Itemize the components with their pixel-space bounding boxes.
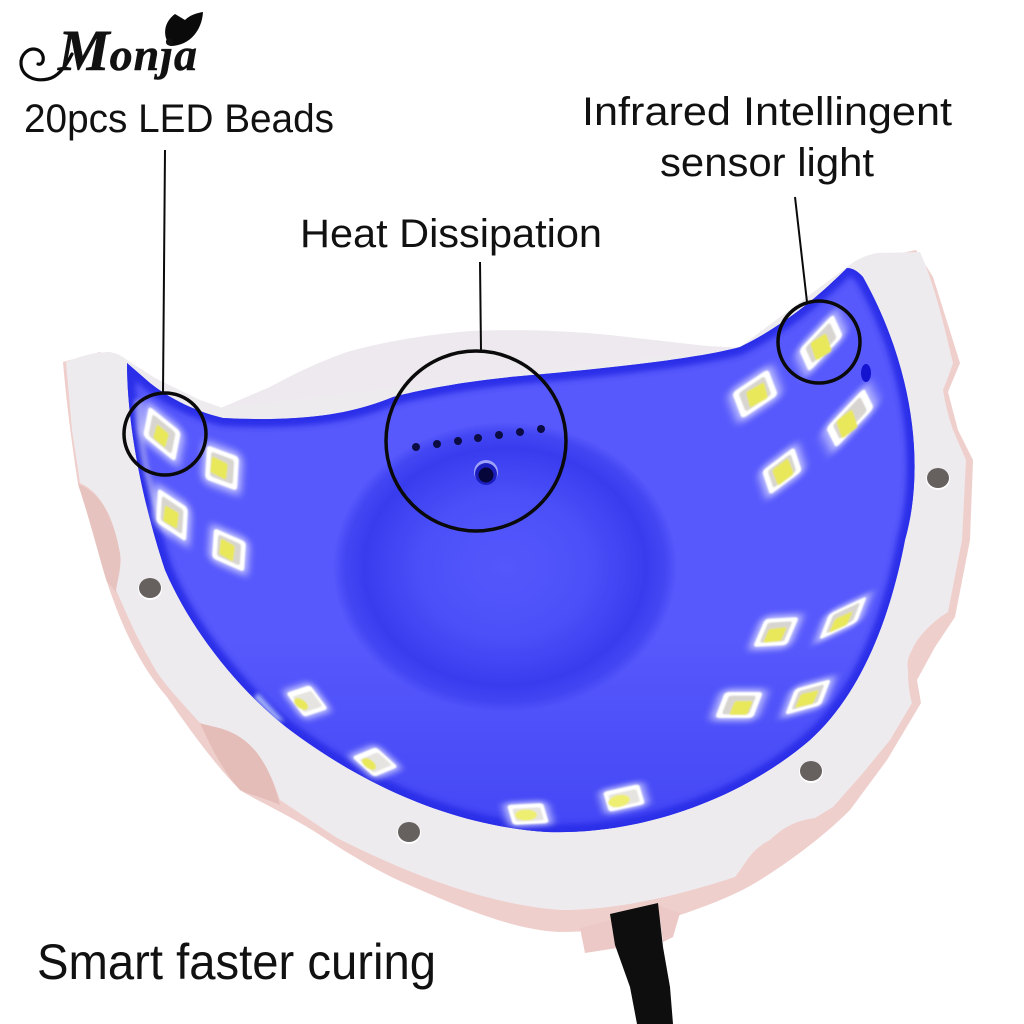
LED bead 10 (780, 675, 836, 719)
label: Infrared Intellingent sensor light (582, 90, 952, 185)
LED bead 3 (153, 483, 191, 547)
LED bead 6 (347, 744, 403, 780)
label: 20pcs LED Beads: 20pcs LED Beads (24, 97, 334, 141)
LED bead 2 (202, 440, 242, 496)
blue illuminated interior (127, 268, 915, 832)
inner dome shadow (333, 422, 677, 712)
LED bead 4 (209, 524, 249, 576)
lower-left reflection (254, 693, 285, 722)
label: Infrared Intellingent sensor light: Infrared Intellingent (582, 90, 952, 134)
LED bead 7 (503, 801, 553, 827)
label: Infrared Intellingent sensor light: sensor light (660, 141, 874, 185)
LED bead 11 (748, 614, 804, 650)
LED bead 15 (758, 442, 806, 500)
LED bead 13 (727, 364, 783, 424)
label: Heat Dissipation: Heat Dissipation (300, 212, 602, 256)
left pink scallop (78, 484, 121, 592)
pink connector tabs (580, 905, 680, 953)
sensor window (861, 364, 871, 382)
LED bead 12 (814, 592, 872, 644)
callout: LED beads ring and line (124, 150, 206, 475)
saturated edge band (127, 268, 915, 832)
lower pink scallop (200, 723, 280, 805)
logo: Monja: Monja (57, 18, 198, 83)
callout: infrared sensor ring and line (778, 197, 860, 383)
lamp rear dome (215, 330, 745, 440)
left rim reflection (134, 400, 172, 540)
lamp face: white rim (66, 252, 966, 910)
lower gradient band (280, 719, 828, 832)
LED bead 16 (795, 308, 847, 378)
LED bead 9 (710, 689, 768, 721)
LED bead 5 (282, 682, 332, 720)
lamp body: pink shell (63, 250, 973, 932)
LED bead 8 (599, 781, 649, 815)
cord (610, 903, 673, 1024)
callout: heat dissipation ring and line (386, 262, 566, 531)
LED beads (139, 308, 879, 827)
heat dissipation vents (412, 425, 545, 485)
LED bead 14 (821, 382, 879, 454)
LED bead 1 (139, 400, 185, 468)
label: Smart faster curing: Smart faster curing (37, 934, 436, 990)
screw holes (138, 468, 950, 844)
